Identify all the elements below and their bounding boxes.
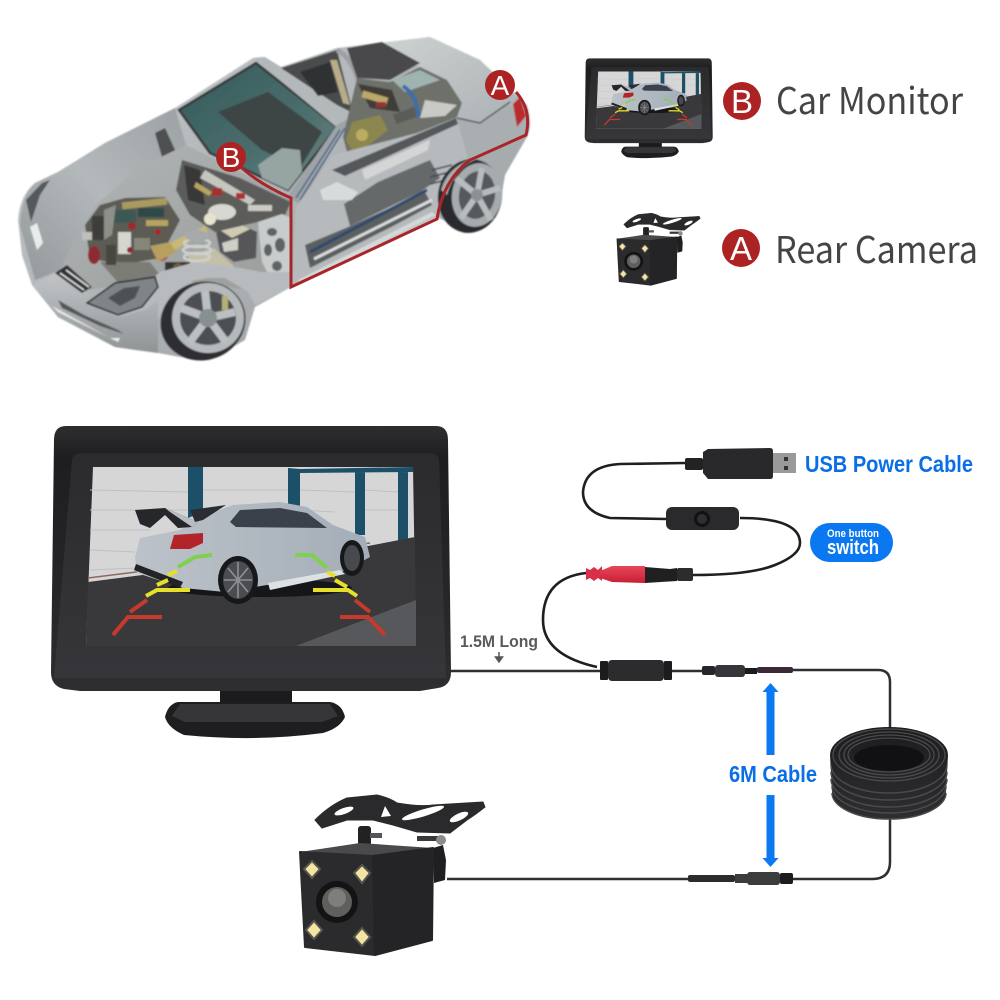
car front wheel	[218, 556, 258, 604]
garage posts	[188, 467, 413, 541]
car painted detail	[18, 37, 530, 372]
door bars	[310, 190, 427, 252]
panel: rear camera product photo	[300, 795, 485, 955]
mounting bracket	[315, 795, 485, 833]
panel: small monitor thumbnail	[585, 58, 713, 158]
LEDs	[304, 861, 370, 946]
front wheel	[149, 270, 257, 372]
front lip highlight	[52, 306, 120, 342]
inline switch	[666, 507, 739, 530]
screen background	[86, 467, 416, 646]
label: Car Monitor: B	[731, 83, 753, 120]
grille slats	[60, 270, 89, 290]
windshield	[179, 63, 337, 190]
seat	[258, 148, 302, 190]
lower intake	[58, 300, 124, 334]
label: Car Monitor: Car Monitor	[776, 71, 964, 125]
pale door streak	[362, 140, 430, 180]
bolt head	[436, 835, 446, 845]
fender strut structure	[258, 214, 291, 282]
spring detail	[430, 165, 452, 184]
pivot post	[358, 826, 371, 846]
callout: one button switch: switch	[827, 537, 879, 559]
roll hoop	[337, 50, 358, 80]
lens	[316, 881, 358, 923]
pillar stripes	[296, 128, 345, 200]
label: 1.5M Long: 1.5M Long	[460, 632, 538, 651]
cable coil	[830, 727, 948, 819]
red power connector	[586, 566, 693, 583]
battery	[216, 224, 257, 262]
coil side windings	[831, 765, 947, 819]
gravel	[296, 600, 416, 646]
label: Rear Camera: A	[730, 230, 752, 267]
car rear bumper dark	[134, 564, 183, 588]
headlight elements	[108, 286, 140, 306]
car spoiler	[135, 508, 198, 528]
arrow: 6M lower	[762, 795, 778, 867]
rear interior	[343, 67, 462, 163]
car body	[135, 502, 370, 592]
grille	[55, 265, 92, 293]
power cable	[543, 463, 800, 667]
car shadow	[168, 579, 352, 597]
lower cable connector	[688, 872, 793, 885]
label: USB Power Cable: USB Power Cable	[805, 451, 973, 477]
engine clutter	[82, 197, 257, 285]
pivot nut	[370, 833, 382, 838]
badge A on car	[485, 70, 515, 101]
upper cable connector	[600, 660, 793, 681]
badge B on car	[216, 142, 246, 173]
hood	[20, 108, 186, 280]
parking guide lines	[113, 555, 385, 635]
garage door ribs	[90, 490, 398, 570]
rear deck glass	[190, 505, 226, 522]
car rear wheel	[340, 540, 364, 576]
monitor outer shell	[51, 426, 451, 691]
label: 6M Cable: 6M Cable	[729, 761, 817, 787]
main AV cable	[447, 670, 890, 879]
camera front face	[300, 852, 375, 955]
side arm	[433, 845, 446, 883]
coil top rings	[833, 729, 945, 781]
soft top	[347, 42, 420, 80]
badge B on car: B	[222, 142, 240, 173]
screen	[86, 467, 416, 646]
cabin dash through windshield	[218, 92, 322, 168]
panel: monitor product photo	[51, 426, 451, 738]
USB plug	[685, 448, 796, 479]
front badge shadow	[26, 180, 50, 222]
camera top face	[300, 843, 433, 856]
callout: one button switch: One button	[827, 528, 879, 540]
rear deck	[347, 37, 527, 160]
red cable route	[238, 92, 528, 287]
hood vent	[155, 128, 176, 157]
arrow: 6M upper	[762, 683, 778, 755]
base top highlight	[172, 704, 338, 722]
door panel	[291, 120, 468, 287]
side mirror	[320, 182, 358, 200]
monitor inner frame	[54, 453, 446, 678]
firewall clutter	[176, 160, 291, 232]
strip	[330, 60, 350, 105]
stand neck	[220, 686, 292, 706]
stand base	[165, 702, 345, 738]
spoiler highlight	[165, 508, 198, 527]
panel: small camera thumbnail	[617, 213, 700, 285]
tail light	[513, 97, 526, 127]
front fender	[90, 262, 291, 353]
roll bar	[403, 86, 418, 118]
camera side face	[373, 848, 433, 955]
bracket holes	[334, 803, 470, 824]
seat backs	[300, 62, 338, 96]
rear wheel	[432, 154, 508, 238]
ground	[86, 537, 416, 646]
door lower cavity	[305, 192, 432, 268]
trunk line	[457, 102, 510, 123]
door base line	[88, 543, 370, 578]
badge A on car: A	[491, 70, 510, 101]
panel: car cutaway illustration	[18, 37, 530, 372]
label: Rear Camera: Rear Camera	[775, 220, 978, 274]
A pillar	[253, 57, 355, 130]
side bolt	[417, 836, 439, 841]
sill light strip	[298, 212, 436, 284]
rear glass	[392, 70, 440, 92]
ghost engine bay	[60, 145, 291, 290]
rear cockpit	[281, 50, 353, 113]
side rear quarter	[457, 105, 527, 160]
suspension spring	[183, 239, 211, 261]
door dark cavity	[344, 160, 440, 226]
body over rear wheel	[441, 137, 527, 195]
car windows	[230, 508, 327, 528]
arrow: 1.5M pointer	[496, 652, 502, 662]
coil centre	[854, 745, 924, 771]
fender holes	[264, 228, 285, 271]
callout: one button switch	[810, 523, 893, 562]
rear clutter	[346, 84, 457, 161]
front bumper	[32, 273, 158, 353]
car skirt	[268, 570, 345, 590]
door bar highlight	[314, 200, 432, 259]
nose slit	[30, 223, 43, 250]
door top rail	[332, 118, 458, 176]
car tail light	[170, 533, 203, 549]
car body silhouette	[18, 37, 530, 360]
headlight	[87, 277, 158, 315]
side pillar	[288, 118, 350, 205]
